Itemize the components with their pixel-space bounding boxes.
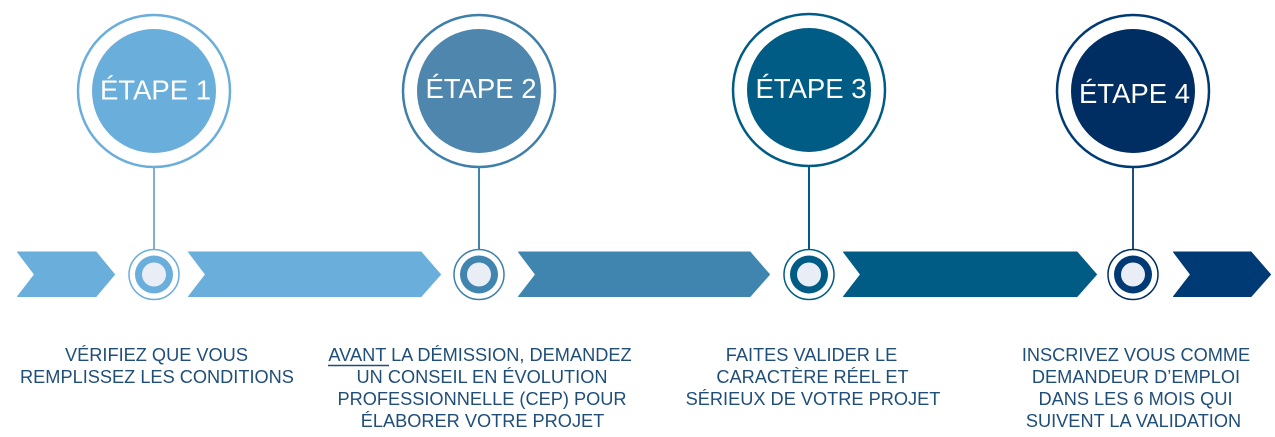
step 2 description: PROFESSIONNELLE (CEP) POUR <box>337 389 627 409</box>
step 1 badge disc <box>92 29 216 153</box>
timeline arrow 2 <box>188 252 440 296</box>
step 3 timeline node <box>784 250 834 300</box>
timeline arrow 3 <box>518 252 770 296</box>
step 3 label: ÉTAPE 3 <box>755 73 867 104</box>
step 2 badge outer ring <box>403 15 555 167</box>
step 1 description: VÉRIFIEZ QUE VOUS <box>65 345 248 365</box>
timeline arrow 1 <box>18 252 114 296</box>
step 4 badge disc <box>1071 29 1195 153</box>
step 4 connector <box>1132 168 1134 250</box>
step 2 timeline node <box>454 250 504 300</box>
step 3 description: FAITES VALIDER LE <box>726 345 897 365</box>
step 2 badge disc <box>417 29 541 153</box>
step 3 badge outer ring <box>733 14 885 166</box>
step 2 marker <box>403 15 555 300</box>
step 4 description: INSCRIVEZ VOUS COMME <box>1022 345 1250 365</box>
timeline arrow 4 <box>844 252 1096 296</box>
step 3 badge disc <box>747 28 871 152</box>
step 1 label: ÉTAPE 1 <box>100 74 211 106</box>
step 1 marker <box>78 15 230 300</box>
step 4 description: SUIVENT LA VALIDATION <box>1026 411 1241 431</box>
step 3 description <box>686 345 940 409</box>
step 4 description <box>1022 345 1250 431</box>
step 1 timeline node <box>129 250 179 300</box>
timeline arrow 5 <box>1174 252 1270 296</box>
step 4 description: DANS LES 6 MOIS QUI <box>1038 389 1233 409</box>
step 2 connector <box>478 168 480 250</box>
step 1 description: REMPLISSEZ LES CONDITIONS <box>20 367 294 387</box>
step 3 marker <box>733 14 885 300</box>
step 4 label: ÉTAPE 4 <box>1079 78 1190 109</box>
step 4 description: DEMANDEUR D’EMPLOI <box>1032 367 1240 387</box>
step 2 label: ÉTAPE 2 <box>425 73 537 104</box>
step 2 description: UN CONSEIL EN ÉVOLUTION <box>357 367 607 387</box>
step 2 description: AVANT LA DÉMISSION, DEMANDEZ <box>328 345 632 365</box>
step 3 description: CARACTÈRE RÉEL ET <box>716 367 909 387</box>
step 3 description: SÉRIEUX DE VOTRE PROJET <box>686 389 940 409</box>
step 2 description <box>328 345 632 431</box>
step 1 badge outer ring <box>78 15 230 167</box>
step 4 timeline node <box>1108 250 1158 300</box>
step 3 connector <box>808 167 810 250</box>
step 4 badge outer ring <box>1057 15 1209 167</box>
step 1 connector <box>153 168 155 250</box>
step 4 marker <box>1057 15 1209 300</box>
step 2 description: ÉLABORER VOTRE PROJET <box>361 411 604 431</box>
step 1 description <box>20 345 294 387</box>
